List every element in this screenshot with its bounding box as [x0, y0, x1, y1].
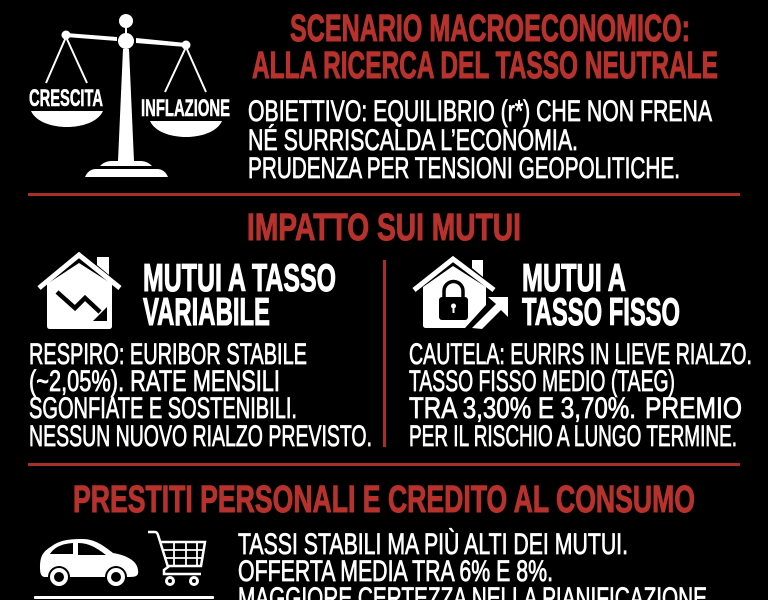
text block: mutui variabile: NESSUN NUOVO RIALZO PREVISTO. — [29, 420, 372, 453]
heading: scenario macroeconomico — [252, 8, 718, 87]
subheading: mutui a tasso fisso: MUTUI A — [522, 257, 626, 300]
icon: balance scale — [29, 14, 230, 177]
subheading: mutui a tasso variabile — [143, 257, 336, 334]
text block: mutui variabile — [29, 338, 372, 453]
scale label: inflazione: INFLAZIONE — [141, 95, 230, 122]
text block: mutui fisso: PREMIO — [645, 392, 742, 425]
text block: prestiti: OFFERTA MEDIA TRA 6% E 8%. — [238, 555, 553, 588]
icon: car — [40, 539, 138, 588]
heading: impatto sui mutui: IMPATTO SUI MUTUI — [247, 207, 521, 249]
subheading: mutui a tasso fisso — [522, 257, 680, 334]
text block: obiettivo — [248, 95, 712, 185]
text block: mutui variabile: (~2,05%). RATE MENSILI — [29, 365, 280, 398]
icon: house with padlock and rising arrow — [414, 259, 508, 329]
text block: mutui fisso — [409, 338, 752, 453]
icon: shopping cart — [148, 532, 205, 584]
subheading: mutui a tasso variabile: MUTUI A TASSO — [143, 257, 336, 300]
subheading: mutui a tasso variabile: VARIABILE — [143, 291, 270, 334]
scale label: crescita: CRESCITA — [29, 85, 103, 112]
text block: mutui fisso: TRA 3,30% E 3,70%. — [409, 392, 636, 425]
icon: house with falling arrow — [39, 255, 120, 329]
text block: prestiti — [238, 528, 707, 600]
text block: obiettivo: NÉ SURRISCALDA L’ECONOMIA. — [248, 124, 578, 157]
text block: mutui variabile: RESPIRO: EURIBOR STABILE — [29, 338, 307, 371]
text block: mutui variabile: SGONFIATE E SOSTENIBILI. — [29, 392, 297, 425]
